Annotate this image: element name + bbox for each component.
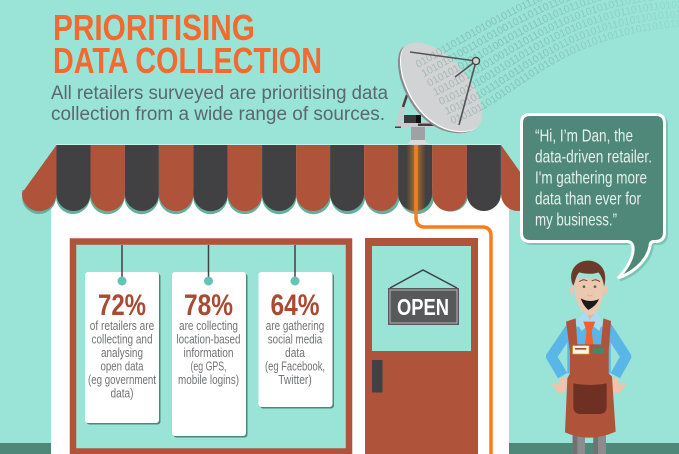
stat card: 72%: analysing (101, 346, 143, 360)
stat card: 72%: 72% (98, 289, 146, 322)
stat card: 78%: are collecting (179, 319, 238, 333)
open sign: OPEN (397, 294, 449, 320)
speech bubble (522, 114, 666, 280)
ground strip (0, 443, 679, 454)
stat card: 64%: Twitter) (278, 373, 312, 387)
window frame (73, 242, 349, 452)
stat card: 78%: (eg GPS, (190, 360, 226, 374)
stat card: 64%: social media (268, 332, 322, 346)
door (365, 238, 478, 454)
stat card: 72%: data) (110, 386, 134, 400)
subtitle: All retailers surveyed are prioritising data (51, 83, 388, 104)
stat card: 72% (85, 245, 160, 424)
data cable (406, 145, 491, 454)
stat card: 64%: 64% (270, 289, 320, 322)
speech bubble: “Hi, I’m Dan, the (535, 126, 633, 146)
title: PRIORITISING (53, 7, 255, 48)
stat card: 64%: (eg Facebook, (265, 360, 325, 374)
speech bubble: my business.” (535, 210, 617, 230)
speech bubble: data than ever for (535, 188, 641, 208)
stat card: 72%: (eg government (88, 373, 156, 387)
stat card: 78%: 78% (184, 289, 233, 322)
stat card: 72%: of retailers are (90, 319, 154, 333)
speech bubble: I'm gathering more (535, 168, 647, 188)
binary data stream (416, 0, 679, 124)
satellite dish body and mount (395, 42, 482, 145)
subtitle: collection from a wide range of sources. (51, 104, 385, 125)
stat card: 78%: information (184, 346, 234, 360)
title: DATA COLLECTION (53, 40, 322, 81)
stat card: 72%: open data (100, 360, 144, 374)
stat card: 72%: collecting and (92, 332, 153, 346)
awning (22, 144, 535, 214)
title (53, 7, 322, 81)
open sign (388, 270, 459, 325)
stat card: 78% (172, 245, 248, 438)
stat card: 64%: data (285, 346, 305, 360)
stat card: 78%: location-based (176, 332, 241, 346)
subtitle (51, 83, 388, 125)
character: Dan the retailer (551, 261, 626, 454)
stat card: 64% (258, 245, 334, 408)
building wall (51, 190, 509, 454)
satellite dish feed arms (410, 52, 480, 125)
stat card: 78%: mobile logins) (178, 373, 239, 387)
stat card: 64%: are gathering (266, 319, 324, 333)
